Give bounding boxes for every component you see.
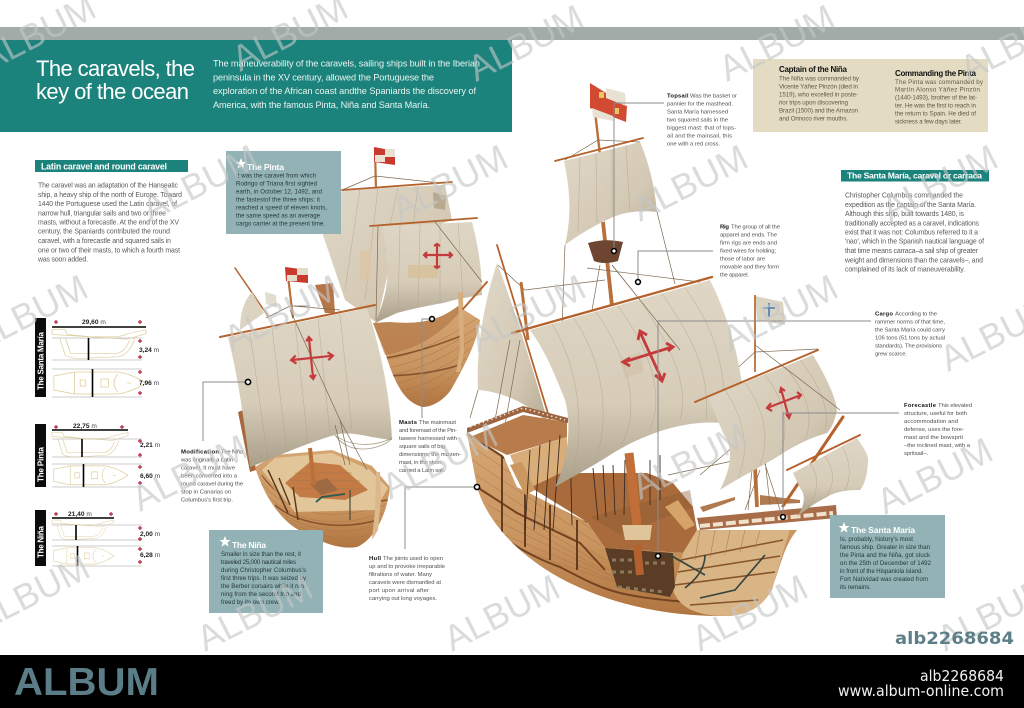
box: The Santa María: The Santa María xyxy=(851,525,915,535)
text: Commanding the Pinta: ter. He was the first to reach in xyxy=(895,103,977,110)
callout: Cargo xyxy=(656,312,945,558)
callout: Forecastle: Forecastle xyxy=(904,403,937,409)
callout: Topsail: pannier for the masthead. xyxy=(667,101,733,107)
box: The Pinta: Rodrigo of Triana first sighted xyxy=(236,180,317,187)
main mast upper xyxy=(592,85,600,155)
callout: Masts: Masts xyxy=(399,420,418,426)
text: Santa María: traditionally accepted as a caravel, indications xyxy=(845,220,980,227)
Pinta hull xyxy=(373,306,480,407)
callout: Cargo: standards). The provisions xyxy=(875,344,942,350)
callout: Cargo: 106 tons (51 tons by actual xyxy=(875,336,945,342)
box: The Niña: during Christopher Columbus's xyxy=(221,567,306,574)
callout: Rig: movable and they form xyxy=(720,265,779,271)
watermarks: ALBUM xyxy=(125,426,254,519)
footer bar xyxy=(0,655,1024,708)
box: The Niña: ning from the second trip and xyxy=(221,591,301,598)
title: key of the ocean xyxy=(36,79,189,104)
box: The Pinta xyxy=(226,151,341,234)
title: The caravels, the xyxy=(36,56,195,81)
diagram: The Pinta dimensions: 22,75 m xyxy=(73,423,97,430)
lower mast xyxy=(629,453,637,525)
intro text xyxy=(213,58,480,110)
callout: Forecastle: mast and the bowsprit xyxy=(904,435,963,441)
text: Commanding the Pinta: Commanding the Pinta xyxy=(895,69,977,78)
callout: Modification: Modification xyxy=(181,449,219,455)
main sail xyxy=(530,280,742,487)
callout: Hull: up and to provoke irreparable xyxy=(369,564,446,570)
text: Santa María: Christopher Columbus commanded the xyxy=(845,193,963,200)
text: Santa María: complained of its lack of maneuverability. xyxy=(845,266,965,273)
box: The Niña: Smaller in size than the rest, it xyxy=(221,551,301,558)
intro text: peninsula in the XV century, allowed the Portuguese the xyxy=(213,72,434,82)
callout: Cargo: rammer norms of that time, xyxy=(875,320,945,326)
Niña hull xyxy=(255,450,390,548)
callout: Hull: filtrations of water. Many xyxy=(369,572,432,578)
Pinta stern castle xyxy=(315,283,335,313)
poop deck xyxy=(470,415,567,455)
image id: alb2268684 xyxy=(895,629,1014,649)
front sail xyxy=(375,222,482,323)
box: The Pinta: reached a speed of eleven knots, xyxy=(236,204,327,211)
callout: Modification xyxy=(180,379,251,503)
header panel xyxy=(0,40,512,132)
icon: Niña red flag xyxy=(285,267,308,283)
watermarks: ALBUM xyxy=(437,566,566,659)
callout: Cargo: the Santa María could carry xyxy=(875,328,945,334)
small flag xyxy=(433,192,446,210)
text: Captain of the Niña: 1519), who excelled in poste- xyxy=(779,92,858,99)
anchor xyxy=(670,555,765,598)
callout: Modification: caravel. It must have xyxy=(181,465,236,471)
watermarks: ALBUM xyxy=(875,136,1004,229)
diagram: The Niña dimensions: 21,40 m xyxy=(68,511,92,518)
diagram: The Santa María dimensions: 7,96 m xyxy=(139,380,160,387)
heading: Latin caravel and round caravel xyxy=(35,160,188,172)
text: Latin caravel: 1440 the Portuguese used the Latin caravel, of xyxy=(38,201,177,208)
callout: Masts: dimensions; the mizzen- xyxy=(399,452,461,458)
text: Captain of the Niña: Captain of the Niña xyxy=(779,65,848,74)
topsail xyxy=(564,142,657,245)
diagram: The Pinta dimensions: 6,60 m xyxy=(140,473,161,480)
callout: Masts: and foremast of the Pin- xyxy=(399,428,457,434)
intro text: exploration of the African coast andthe Spaniards the discovery of xyxy=(213,86,476,96)
callout: Topsail xyxy=(612,93,737,253)
callout: Hull xyxy=(369,484,480,602)
main deck xyxy=(530,473,697,553)
stern rail xyxy=(238,409,256,472)
icon: star xyxy=(236,158,246,169)
watermarks: ALBUM xyxy=(463,266,592,359)
callout: Forecastle: accommodation and xyxy=(904,419,958,425)
box: The Niña: traveled 25,000 nautical miles xyxy=(221,559,296,566)
callout: Masts: The mainmast xyxy=(419,420,456,426)
text: Commanding the Pinta: Martín Alonso Yáñez Pinzón xyxy=(895,87,981,94)
hull xyxy=(467,433,797,616)
hold cutaway xyxy=(605,548,675,597)
box: The Pinta: It was the caravel from which xyxy=(236,172,316,179)
callout: Masts: carried a Latin sail. xyxy=(399,468,445,474)
text: Santa María: weight and dimensions than the caravels–, and xyxy=(844,257,983,264)
foremast xyxy=(755,467,757,507)
diagram: The Pinta dimensions: 2,21 m xyxy=(140,442,161,449)
diagram: The Niña dimensions xyxy=(35,510,161,566)
watermarks: ALBUM xyxy=(217,266,346,359)
stairs xyxy=(665,500,695,530)
diagram: The Santa María dimensions: The Santa María xyxy=(36,331,46,390)
text: Santa María: expedition as the captain of the Santa María. xyxy=(845,202,976,209)
main sail xyxy=(228,308,392,467)
text: Santa María: that time means carraca–a sail ship of greater xyxy=(845,248,979,255)
box: The Niña: freed by its own crew. xyxy=(221,599,280,606)
callout: Rig: apparel and ends. The xyxy=(720,233,778,239)
callout: Hull: port upon arrival after xyxy=(369,588,429,594)
box: The Niña: the Berber corsairs while it run- xyxy=(221,583,306,590)
text: Captain of the Niña: The Niña was commanded by xyxy=(779,76,860,83)
footer id and url: alb2268684 xyxy=(920,667,1004,685)
callout: Hull: The joints used to open xyxy=(383,556,443,562)
mizzen sail xyxy=(240,292,264,330)
callout: Masts xyxy=(399,317,461,474)
forecastle rail xyxy=(697,505,837,530)
footer id and url: www.album-online.com xyxy=(838,682,1004,700)
poop bulkhead xyxy=(510,437,567,490)
bow planks xyxy=(673,530,790,616)
intro text: America, with the famous Pinta, Niña and Santa María. xyxy=(213,100,430,110)
callout: Modification: round caravel during the xyxy=(181,481,244,487)
watermarks: ALBUM xyxy=(715,266,844,359)
callout: Forecastle: defense, uses the fore- xyxy=(904,427,964,433)
text: Latin caravel xyxy=(37,183,182,264)
box: The Niña: first three trips. It was seized by xyxy=(221,575,307,582)
callout: Topsail: Santa María harnessed xyxy=(667,109,728,115)
text: Latin caravel: narrow hull, triangular sails and two or three xyxy=(38,210,166,217)
back sail xyxy=(323,185,452,323)
bowsprit xyxy=(783,417,843,506)
text: Latin caravel: ship, a heavy ship of the north of Europe. Toward xyxy=(38,192,182,199)
callout: Forecastle: This elevated xyxy=(938,403,972,409)
diagram: The Niña dimensions: 2,00 m xyxy=(140,531,161,538)
box: The Pinta: the same speed as an average xyxy=(236,212,321,219)
title xyxy=(36,56,195,104)
footer logo: ALBUM xyxy=(14,661,159,704)
callout: Forecastle: spritsail–. xyxy=(904,451,928,457)
text: Captain of the Niña: and Orinoco river mouths. xyxy=(779,116,848,123)
text: Commanding the Pinta xyxy=(895,69,984,125)
callout: Rig: the apparel. xyxy=(720,273,749,279)
deck xyxy=(285,462,368,500)
callout: Rig: The group of all the xyxy=(731,224,781,230)
box: The Pinta: earth, in October 12, 1492, and xyxy=(236,188,322,195)
text: Latin caravel: was soon added. xyxy=(37,257,88,264)
box: The Pinta: The Pinta xyxy=(247,162,284,172)
text: Latin caravel: masts, without a forecastle. At the end of the XV xyxy=(38,219,179,226)
box: The Santa María: on the 25th of December of 1492 xyxy=(840,560,932,567)
watermarks: ALBUM xyxy=(135,136,264,229)
diagram: The Santa María dimensions: 29,60 m xyxy=(82,319,106,326)
box: The Santa María: Is, probably, history's most xyxy=(840,536,913,543)
box: The Santa María: famous ship. Greater in size than xyxy=(840,544,930,551)
callout: Forecastle: structure, useful for both xyxy=(904,411,967,417)
text: Santa María: Although this ship, built towards 1480, is xyxy=(845,211,965,218)
callout: Forecastle xyxy=(781,403,972,519)
diagram: The Niña dimensions: 6,28 m xyxy=(140,552,161,559)
box: The Santa María: Fort Natividad was created from xyxy=(840,576,928,583)
text: Santa María: exist that it was not: Columbus referred to it a xyxy=(845,229,978,236)
diagram: The Pinta dimensions xyxy=(35,423,161,487)
text: Santa María xyxy=(844,193,984,273)
mizzen sail xyxy=(478,263,548,423)
callout: Rig: Rig xyxy=(720,224,729,230)
icon: Santa María flag xyxy=(590,83,627,122)
crow's nest xyxy=(588,240,623,263)
callout: Rig: firm rigs are ends and xyxy=(720,241,777,247)
watermarks: ALBUM xyxy=(870,429,999,522)
icon: Pinta flag xyxy=(374,147,395,165)
callout: Modification: Columbus's first trip. xyxy=(181,497,233,503)
text: Captain of the Niña xyxy=(779,65,860,123)
callout: Masts: square sails of big xyxy=(399,444,445,450)
watermarks: ALBUM xyxy=(685,566,814,659)
box: The Niña xyxy=(209,530,323,613)
text: Commanding the Pinta: (1440-1493), brother of the lat- xyxy=(895,95,977,102)
text: Latin caravel: one or two of their masts, to which a fourth mast xyxy=(38,247,180,254)
callout: Rig xyxy=(636,224,781,284)
text: Latin caravel: The caravel was an adaptation of the Hanseatic xyxy=(38,183,179,190)
watermarks: ALBUM xyxy=(375,414,504,507)
heading: Latin caravel and round caravel: Latin caravel and round caravel xyxy=(41,162,167,172)
box: The Santa María xyxy=(830,515,945,598)
diagram: The Pinta dimensions: The Pinta xyxy=(36,446,46,482)
box: captains xyxy=(753,59,988,132)
inner wall xyxy=(262,453,388,512)
callout: Topsail: one with a red cross. xyxy=(667,141,720,147)
callout: Modification: was originally a Latin xyxy=(180,457,233,463)
callout: Hull: Hull xyxy=(369,556,381,562)
box: The Santa María: in front of the Hispaniola island. xyxy=(840,568,923,575)
box: The Santa María: its remains. xyxy=(840,584,871,591)
watermarks: ALBUM xyxy=(625,136,754,229)
text: Commanding the Pinta: sickness a few days later. xyxy=(895,118,962,125)
icon: star xyxy=(220,536,230,547)
callout: Topsail: two squared sails in the xyxy=(667,117,729,123)
text: Santa María: 'nao', which in the Spanish nautical language of xyxy=(845,239,984,246)
diagram: The Niña dimensions: The Niña xyxy=(36,525,46,558)
callout: Modification: The Niña xyxy=(221,449,244,455)
text: Captain of the Niña: Brazil (1500) and the Amazon xyxy=(779,108,859,115)
spritsail xyxy=(793,438,868,517)
text: Latin caravel: caravel, with a forecastle and squared sails in xyxy=(38,238,171,245)
anchor and hatch xyxy=(310,478,350,520)
box: The Pinta: the fastestof the three ships: it xyxy=(236,196,320,203)
watermarks: ALBUM xyxy=(385,136,514,229)
foresail xyxy=(708,355,837,490)
text: Commanding the Pinta: the return to Spain. He died of xyxy=(895,111,976,118)
icon: second flag xyxy=(755,295,785,372)
illustration: Niña ship xyxy=(220,267,392,548)
diagram: The Santa María dimensions xyxy=(35,318,160,397)
callout: Topsail: Was the basket or xyxy=(690,93,737,99)
callout: Masts: mast, in the stern, xyxy=(399,460,443,466)
callout: Cargo: grew scarce. xyxy=(875,352,907,358)
box: The Santa María: the Pinta and the Niña, got stuck xyxy=(840,552,931,559)
watermarks: ALBUM xyxy=(625,414,754,507)
text: Commanding the Pinta: The Pinta was commanded by xyxy=(895,79,984,86)
callout: Forecastle: –the inclined mast, with a xyxy=(904,443,971,449)
diagram: The Santa María dimensions: 3,24 m xyxy=(139,347,160,354)
text: Latin caravel: century, the Spaniards contributed the round xyxy=(38,229,170,236)
top grey band xyxy=(0,27,1024,40)
illustration: Santa María ship xyxy=(467,83,868,616)
callout: Cargo: Cargo xyxy=(875,312,893,318)
watermarks: ALBUM xyxy=(190,566,319,659)
icon: star xyxy=(838,522,850,533)
callout: Hull: carrying out long voyages. xyxy=(369,596,437,602)
callout: Topsail: ail and the mainsail, this xyxy=(667,133,732,139)
callout: Modification: stop in Canarias on xyxy=(181,489,231,495)
text: Captain of the Niña: rior trips upon discovering xyxy=(779,100,849,107)
footer id and url xyxy=(838,667,1004,700)
callout: Hull: caravels were dismantled at xyxy=(369,580,441,586)
box: The Pinta: cargo carrier at the present time. xyxy=(236,220,325,227)
callout: Cargo: According to the xyxy=(895,312,938,318)
callout: Modification: been converted into a xyxy=(181,473,238,479)
callout: Masts: tawere harnessed with xyxy=(399,436,457,442)
callout: Topsail: Topsail xyxy=(667,93,689,99)
heading: The Santa María, caravel or carraca: The Santa María, caravel or carraca xyxy=(847,170,982,180)
callout: Rig: those of labor are xyxy=(720,257,766,263)
illustration: Pinta ship xyxy=(315,147,487,407)
intro text: The maneuverability of the caravels, sailing ships built in the Iberian xyxy=(213,58,480,68)
box: The Niña: The Niña xyxy=(232,540,266,550)
text: Captain of the Niña: Vicente Yáñez Pinzón (died in xyxy=(779,84,859,91)
callout: Topsail: biggest mast: that of tops- xyxy=(667,125,736,131)
callout: Rig: fixed wires for holding; xyxy=(720,249,776,255)
icon: Niña small flag xyxy=(265,292,277,308)
